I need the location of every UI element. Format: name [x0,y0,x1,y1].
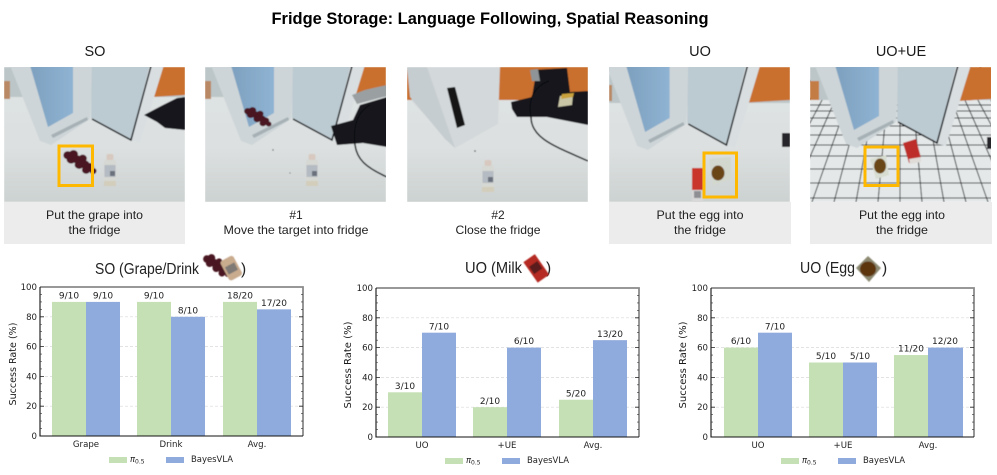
icon: grape and bottle [203,254,243,281]
chart: UO milk [343,254,639,466]
legend: BayesVLA [527,455,569,465]
y tick labels: 20 [697,403,708,413]
caption: #2 [491,208,505,222]
x category labels: +UE [498,441,516,451]
chart title: UO (Milk [465,260,522,277]
caption: Put the egg into [656,208,744,222]
panel: step 1 [205,55,387,237]
caption: the fridge [674,223,726,237]
chart title: UO (Egg [800,260,855,277]
y axis label: Success Rate (%) [678,322,689,408]
y tick labels [357,284,373,443]
bar value labels: 13/20 [597,330,623,340]
bar value labels: 7/10 [765,322,785,332]
bar value labels: 5/10 [816,352,836,362]
bar value labels: 11/20 [898,345,924,355]
bar value labels: 9/10 [93,292,113,302]
caption [46,208,143,237]
panel: step 2 [407,67,588,237]
photo: egg and milk by open fridge [604,60,790,203]
legend: π [130,454,135,464]
bar value labels: 12/20 [932,337,958,347]
chart title: ) [882,260,887,277]
photo: egg and milk on grid floor [810,67,991,202]
chart title [800,260,887,277]
y tick labels: 80 [697,314,708,324]
y tick labels: 80 [362,314,373,324]
y tick labels: 100 [692,284,708,294]
caption: Move the target into fridge [224,223,369,237]
bars [388,333,627,437]
legend: π [466,455,471,465]
chart: SO grape and drink [8,254,303,466]
plot [678,284,974,466]
photo: arm closing fridge [407,67,588,202]
chart: UO egg [678,256,974,466]
chart title: SO (Grape/Drink [95,261,199,278]
caption [456,208,541,237]
x category labels [415,441,602,451]
chart title: ) [241,261,246,278]
caption [656,208,744,237]
y tick labels: 0 [703,433,708,443]
caption [224,208,369,237]
heading: SO: SO [85,44,105,60]
x category labels: Grape [73,440,99,450]
y tick labels: 60 [697,344,708,354]
legend: BayesVLA [863,455,905,465]
x category labels: +UE [834,441,852,451]
legend: BayesVLA [191,454,233,464]
x category labels: UO [415,441,429,451]
bars [724,333,963,437]
bar value labels: 6/10 [514,337,534,347]
bar value labels: 5/20 [566,389,586,399]
plot [343,284,639,466]
bar value labels [731,322,958,362]
caption: the fridge [876,223,928,237]
bar value labels [59,292,287,316]
y tick labels: 100 [357,284,373,294]
legend [781,455,905,466]
bar value labels: 18/20 [227,292,253,302]
caption: the fridge [68,223,121,237]
y tick labels: 0 [32,432,37,442]
bar value labels: 7/10 [429,322,449,332]
y tick labels: 20 [26,402,37,412]
x category labels: Drink [160,440,183,450]
title: Fridge Storage: Language Following, Spatial Reasoning [272,10,708,28]
caption: #1 [289,208,303,222]
legend: 0.5 [135,458,145,466]
icon: milk carton [523,254,549,283]
caption: Put the egg into [859,208,945,222]
x category labels [73,440,266,450]
y tick labels: 40 [697,373,708,383]
chart title: ) [546,260,551,277]
photo: grape and drink by open fridge [4,55,185,202]
y tick labels: 100 [21,283,37,293]
panel: SO scene with caption [4,55,185,244]
heading: UO+UE: UO+UE [876,44,927,60]
legend: 0.5 [471,460,481,466]
target box [59,146,92,186]
y tick labels: 0 [368,433,373,443]
caption [859,208,945,237]
bar value labels: 9/10 [144,292,164,302]
bar value labels: 5/10 [850,352,870,362]
y axis label: Success Rate (%) [343,322,354,408]
heading: UO: UO [689,44,711,60]
panel: UO scene with caption [604,60,791,244]
bar value labels: 6/10 [731,337,751,347]
legend [445,455,569,466]
photo: arm moving grape into fridge [205,55,387,202]
caption: Close the fridge [456,223,541,237]
target box [704,153,736,197]
y tick labels [692,284,708,443]
target box [865,147,898,186]
x category labels: Avg. [248,440,266,450]
y tick labels [21,283,37,442]
icon: egg [856,256,881,282]
x category labels [751,441,937,451]
y tick labels: 80 [26,313,37,323]
y axis label: Success Rate (%) [8,322,19,406]
legend [109,454,233,466]
bar value labels: 2/10 [480,397,500,407]
panel: UO+UE scene with caption [810,67,992,244]
y tick labels: 60 [362,344,373,354]
x category labels: UO [751,441,765,451]
bar value labels: 8/10 [178,306,198,316]
x category labels: Avg. [584,441,602,451]
plot [8,283,303,466]
bar value labels: 9/10 [59,292,79,302]
bars [52,302,291,436]
chart title [465,260,551,277]
legend: π [802,455,807,465]
bar value labels: 17/20 [261,299,287,309]
y tick labels: 20 [362,403,373,413]
y tick labels: 40 [26,372,37,382]
y tick labels: 40 [362,373,373,383]
x category labels: Avg. [919,441,937,451]
caption: Put the grape into [46,208,143,222]
legend: 0.5 [807,460,817,466]
y tick labels: 60 [26,343,37,353]
bar value labels [395,322,623,407]
bar value labels: 3/10 [395,382,415,392]
